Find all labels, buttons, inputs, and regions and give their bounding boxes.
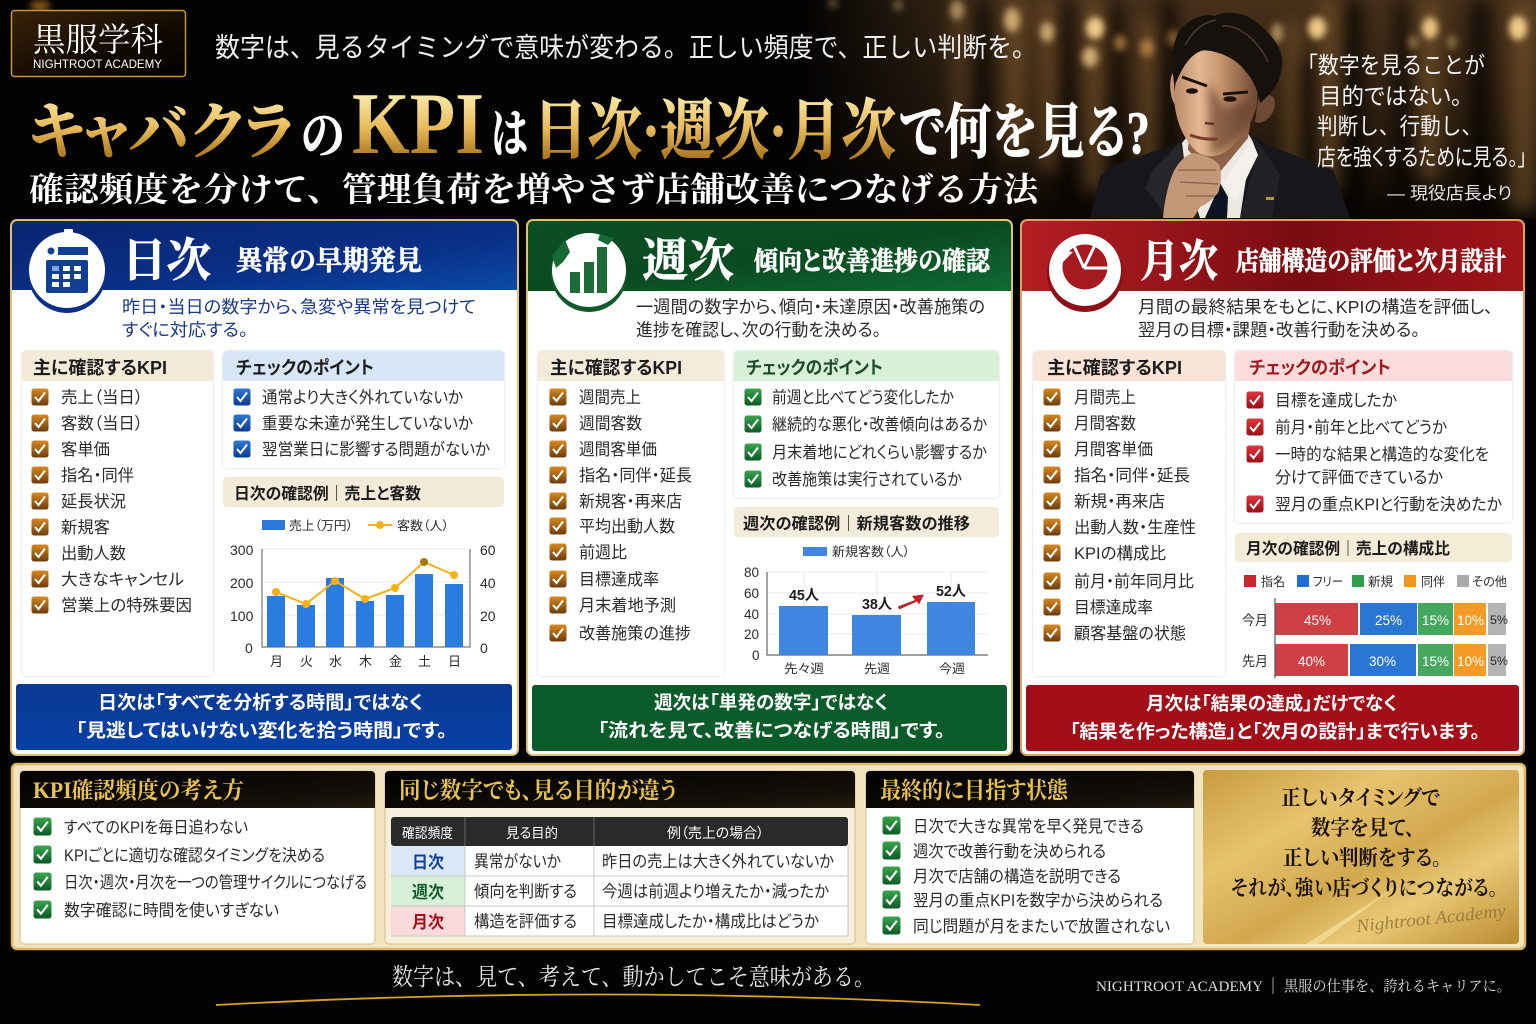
heading: 最終的に目指す状態 bbox=[880, 778, 1070, 803]
subheading: 異常の早期発見 bbox=[236, 246, 422, 276]
card: KPI list: 前月・前年同月比 bbox=[1074, 572, 1194, 591]
logo badge bbox=[12, 10, 186, 76]
message text: 数字を見て、 bbox=[1311, 816, 1415, 840]
comparison table: 見る目的 bbox=[506, 825, 558, 841]
combo chart: sales and customers: 60 bbox=[480, 542, 496, 558]
bar chart: new customers: 先々週 bbox=[784, 662, 825, 676]
checklist: 週次で改善行動を決められる bbox=[913, 842, 1106, 861]
comparison table: 確認頻度 bbox=[402, 825, 453, 841]
chart title: 日次の確認例｜売上と客数 bbox=[234, 484, 421, 503]
checklist: 数字確認に時間を使いすぎない bbox=[64, 901, 279, 920]
stacked bar chart: sales composition: 10% bbox=[1457, 654, 1484, 669]
combo chart: sales and customers: 月 bbox=[270, 654, 283, 669]
main title: で何を見る? bbox=[899, 100, 1150, 166]
card: 最終的に目指す状態 bbox=[866, 771, 1194, 944]
combo chart: sales and customers: 0 bbox=[480, 640, 488, 656]
footer curve bbox=[216, 994, 980, 1005]
main title: 日次·週次·月次 bbox=[533, 95, 896, 168]
card: KPI list: 指名・同伴・延長 bbox=[1074, 466, 1190, 485]
card: check points: チェックのポイント bbox=[1249, 357, 1391, 378]
stacked bar chart: sales composition bbox=[1242, 574, 1508, 678]
combo chart: sales and customers: 土 bbox=[418, 654, 431, 669]
stacked bar chart: sales composition: 15% bbox=[1422, 654, 1449, 669]
description: 昨日・当日の数字から、急変や異常を見つけて bbox=[122, 297, 476, 317]
banner: 「流れを見て、改善につなげる時間」です。 bbox=[598, 720, 945, 741]
chart title: 週次の確認例｜新規客数の推移 bbox=[743, 514, 970, 533]
comparison table: 今週は前週より増えたか・減ったか bbox=[602, 882, 829, 901]
bar chart: new customers: 40 bbox=[744, 607, 759, 622]
card: KPI list: 主に確認するKPI bbox=[33, 358, 167, 378]
main title: KPI bbox=[352, 76, 484, 173]
card: KPI list: 月末着地予測 bbox=[579, 596, 676, 615]
card: KPI list: 週間客単価 bbox=[579, 440, 657, 459]
chart title bbox=[223, 477, 504, 507]
message text: それが、強い店づくりにつながる。 bbox=[1231, 876, 1498, 900]
card: KPI確認頻度の考え方 bbox=[20, 771, 375, 944]
combo chart: sales and customers: 20 bbox=[480, 608, 496, 624]
description: 翌月の目標・課題・改善行動を決める。 bbox=[1138, 320, 1420, 340]
card: KPI list: 週間客数 bbox=[579, 414, 642, 433]
combo chart: sales and customers: 売上（万円） bbox=[289, 518, 353, 533]
stacked bar chart: sales composition: 同伴 bbox=[1421, 575, 1445, 589]
panel frame bbox=[1021, 220, 1524, 755]
main title: キャバクラ bbox=[28, 99, 294, 167]
checklist: KPIごとに適切な確認タイミングを決める bbox=[64, 846, 325, 865]
stacked bar chart: sales composition: 30% bbox=[1369, 654, 1396, 669]
quote: ― 現役店長より bbox=[1387, 184, 1512, 203]
checklist: 日次・週次・月次を一つの管理サイクルにつなげる bbox=[64, 873, 367, 892]
checklist: すべてのKPIを毎日追わない bbox=[64, 818, 248, 837]
card: check points bbox=[223, 351, 504, 468]
card: KPI list: 出動人数 bbox=[61, 544, 126, 563]
card: check points: 継続的な悪化・改善傾向はあるか bbox=[772, 415, 987, 434]
description bbox=[636, 297, 985, 340]
combo chart: sales and customers: 40 bbox=[480, 575, 496, 591]
card: check points: 前週と比べてどう変化したか bbox=[772, 388, 954, 407]
bar chart: new customers: 先週 bbox=[864, 662, 891, 676]
bar chart: new customers: 20 bbox=[744, 627, 759, 642]
card: check points: チェックのポイント bbox=[746, 357, 883, 378]
tagline: 数字は、見るタイミングで意味が変わる。正しい頻度で、正しい判断を。 bbox=[215, 33, 1037, 63]
header band bbox=[528, 221, 1011, 291]
footer credit: NIGHTROOT ACADEMY bbox=[1096, 979, 1263, 995]
main title: の bbox=[300, 108, 345, 166]
description bbox=[1138, 297, 1493, 340]
header band bbox=[1022, 221, 1523, 291]
card: KPI list: 顧客基盤の状態 bbox=[1074, 624, 1186, 643]
bar chart: new customers: 今週 bbox=[939, 661, 966, 676]
bar chart: new customers: 45人 bbox=[789, 588, 819, 604]
card: check points: 月末着地にどれくらい影響するか bbox=[772, 443, 987, 462]
card: KPI list: 新規客・再来店 bbox=[579, 492, 682, 511]
card: KPI list: 出動人数・生産性 bbox=[1074, 518, 1196, 537]
stacked bar chart: sales composition: 今月 bbox=[1242, 613, 1268, 628]
banner: 日次は「すべてを分析する時間」ではなく bbox=[98, 692, 423, 713]
icon: growth bars bbox=[551, 233, 627, 312]
card: check points bbox=[1235, 351, 1512, 523]
heading: 日次 bbox=[122, 235, 211, 286]
card: KPI list: 営業上の特殊要因 bbox=[61, 596, 192, 615]
banner: 「結果を作った構造」と「次月の設計」まで行います。 bbox=[1070, 721, 1480, 742]
message text bbox=[1231, 786, 1498, 900]
card: KPI list: 客単価 bbox=[61, 440, 110, 459]
card: gold closing message bbox=[1203, 770, 1519, 944]
card: KPI list: 月間客単価 bbox=[1074, 440, 1153, 459]
stacked bar chart: sales composition: 先月 bbox=[1242, 654, 1268, 669]
logo badge: 黒服学科 bbox=[33, 22, 163, 59]
comparison table: 月次 bbox=[412, 913, 444, 932]
quote bbox=[1297, 52, 1527, 203]
bar chart: new customers: 60 bbox=[744, 586, 759, 601]
card: KPI list: 指名・同伴・延長 bbox=[579, 466, 692, 485]
bar chart: new customers: 52人 bbox=[936, 584, 966, 600]
stacked bar chart: sales composition: 5% bbox=[1490, 656, 1508, 668]
comparison table bbox=[391, 817, 848, 936]
card: KPI list: 新規客 bbox=[61, 518, 110, 537]
combo chart: sales and customers bbox=[230, 518, 496, 669]
banner bbox=[532, 685, 1007, 751]
comparison table: 異常がないか bbox=[474, 852, 561, 871]
combo chart: sales and customers: 水 bbox=[329, 654, 342, 669]
card: check points: 一時的な結果と構造的な変化を bbox=[1275, 445, 1489, 464]
bar chart: new customers: 0 bbox=[752, 648, 760, 663]
description: すぐに対応する。 bbox=[122, 320, 248, 340]
description: 進捗を確認し、次の行動を決める。 bbox=[636, 320, 881, 340]
arrow bbox=[898, 594, 924, 610]
stacked bar chart: sales composition: 40% bbox=[1298, 654, 1325, 669]
combo chart: sales and customers: 日 bbox=[448, 654, 461, 669]
main title bbox=[28, 76, 1150, 173]
card: check points: 目標を達成したか bbox=[1275, 391, 1397, 410]
comparison table: 週次 bbox=[412, 883, 444, 902]
comparison table: 日次 bbox=[412, 853, 444, 872]
card: KPI list: 大きなキャンセル bbox=[61, 570, 184, 589]
combo chart: sales and customers: 300 bbox=[230, 542, 254, 558]
person: manager in suit bbox=[1090, 13, 1350, 218]
panel: 日次 bbox=[11, 220, 518, 755]
card: KPI list: 指名・同伴 bbox=[61, 466, 134, 485]
card: check points: 前月・前年と比べてどうか bbox=[1275, 418, 1447, 437]
checklist: 同じ問題が月をまたいで放置されない bbox=[913, 917, 1170, 936]
message text: 正しい判断をする。 bbox=[1283, 846, 1442, 870]
bottom gold frame bbox=[12, 764, 1525, 949]
card: KPI list bbox=[1033, 351, 1225, 676]
quote: 判断し、行動し、 bbox=[1317, 113, 1482, 139]
card: check points: 通常より大きく外れていないか bbox=[262, 388, 463, 407]
stacked bar chart: sales composition: 新規 bbox=[1368, 574, 1393, 589]
card: check points: チェックのポイント bbox=[236, 357, 374, 378]
bokeh background bbox=[30, 0, 1536, 218]
message text: 正しいタイミングで bbox=[1281, 786, 1440, 810]
checklist bbox=[34, 818, 367, 920]
footer slogan: 数字は、見て、考えて、動かしてこそ意味がある。 bbox=[392, 964, 875, 991]
subheading: 傾向と改善進捗の確認 bbox=[754, 246, 992, 276]
comparison table: 目標達成したか・構成比はどうか bbox=[602, 912, 819, 931]
subheading: 店舗構造の評価と次月設計 bbox=[1236, 247, 1506, 276]
card: check points: 翌営業日に影響する問題がないか bbox=[262, 440, 490, 459]
header band bbox=[12, 221, 517, 290]
card: KPI list: 延長状況 bbox=[61, 492, 126, 511]
card: KPI list: 売上（当日） bbox=[61, 388, 143, 407]
stacked bar chart: sales composition: 指名 bbox=[1261, 574, 1285, 589]
quote: 目的ではない。 bbox=[1319, 83, 1462, 109]
heading: 同じ数字でも、見る目的が違う bbox=[399, 778, 677, 803]
logo badge: NIGHTROOT ACADEMY bbox=[33, 59, 162, 71]
card: check points: 改善施策は実行されているか bbox=[772, 470, 962, 489]
combo chart: sales and customers: 火 bbox=[300, 654, 313, 669]
card: KPI list: 平均出動人数 bbox=[579, 517, 675, 536]
bar chart: new customers: 80 bbox=[744, 565, 759, 580]
signature: Nightroot Academy bbox=[1354, 900, 1507, 936]
description: 月間の最終結果をもとに、KPIの構造を評価し、 bbox=[1138, 297, 1493, 317]
checklist bbox=[883, 817, 1170, 936]
card: KPI list: 客数（当日） bbox=[61, 414, 143, 433]
card: KPI list bbox=[538, 351, 724, 676]
description: 一週間の数字から、傾向・未達原因・改善施策の bbox=[636, 297, 985, 317]
chart title: 月次の確認例｜売上の構成比 bbox=[1246, 539, 1450, 558]
bar chart: new customers: 新規客数（人） bbox=[832, 544, 910, 559]
comparison table: 構造を評価する bbox=[474, 912, 577, 931]
checklist: 翌月の重点KPIを数字から決められる bbox=[913, 891, 1163, 910]
main title: は bbox=[490, 107, 528, 164]
card: KPI list: 目標達成率 bbox=[1074, 598, 1153, 617]
card: check points bbox=[734, 351, 999, 498]
checklist: 日次で大きな異常を早く発見できる bbox=[913, 817, 1144, 836]
quote: 「数字を見ることが bbox=[1297, 52, 1485, 78]
card: KPI list: 改善施策の進捗 bbox=[579, 624, 691, 643]
card: KPI list: 目標達成率 bbox=[579, 570, 659, 589]
combo chart: sales and customers: 客数（人） bbox=[397, 518, 449, 533]
banner bbox=[16, 684, 512, 750]
panel: 週次 bbox=[527, 220, 1012, 755]
subtitle: 確認頻度を分けて、管理負荷を増やさず店舗改善につなげる方法 bbox=[29, 172, 1042, 209]
bar chart: new customers: 38人 bbox=[862, 597, 892, 613]
banner: 週次は「単発の数字」ではなく bbox=[654, 692, 888, 713]
banner bbox=[1026, 685, 1519, 751]
stacked bar chart: sales composition: 10% bbox=[1457, 613, 1484, 628]
card: KPI list: 主に確認するKPI bbox=[1047, 358, 1182, 378]
stacked bar chart: sales composition: 25% bbox=[1375, 613, 1402, 628]
card: KPI list: 主に確認するKPI bbox=[550, 358, 682, 378]
icon: pie chart bbox=[1047, 234, 1123, 312]
chart title bbox=[734, 507, 999, 537]
stacked bar chart: sales composition: その他 bbox=[1472, 575, 1507, 589]
combo chart: sales and customers: 200 bbox=[230, 575, 254, 591]
card: KPI list: 新規・再来店 bbox=[1074, 492, 1165, 511]
card: KPI list bbox=[22, 351, 213, 676]
card: check points: 分けて評価できているか bbox=[1275, 468, 1443, 487]
card: KPI list: KPIの構成比 bbox=[1074, 544, 1166, 563]
card: check points: 重要な未達が発生していないか bbox=[262, 414, 473, 433]
description bbox=[122, 297, 476, 340]
banner: 「見逃してはいけない変化を拾う時間」です。 bbox=[76, 720, 447, 741]
panel frame bbox=[11, 220, 518, 755]
card: check points: 翌月の重点KPIと行動を決めたか bbox=[1275, 495, 1502, 514]
card: KPI list: 月間売上 bbox=[1074, 388, 1136, 407]
footer credit: 黒服の仕事を、誇れるキャリアに。 bbox=[1284, 978, 1511, 995]
banner: 月次は「結果の達成」だけでなく bbox=[1146, 693, 1397, 714]
footer credit bbox=[1096, 977, 1511, 995]
combo chart: sales and customers: 金 bbox=[389, 654, 402, 669]
heading: 週次 bbox=[642, 235, 734, 286]
comparison table: 昨日の売上は大きく外れていないか bbox=[602, 852, 834, 871]
card: 同じ数字でも、見る目的が違う bbox=[385, 771, 855, 944]
card: KPI list: 月間客数 bbox=[1074, 414, 1136, 433]
heading: 月次 bbox=[1140, 237, 1218, 286]
combo chart: sales and customers: 0 bbox=[245, 640, 253, 656]
card: KPI list: 前週比 bbox=[579, 543, 627, 562]
comparison table: 例（売上の場合） bbox=[667, 825, 764, 841]
combo chart: sales and customers: 100 bbox=[230, 608, 254, 624]
panel: 月次 bbox=[1021, 220, 1524, 755]
stacked bar chart: sales composition: 5% bbox=[1490, 615, 1508, 627]
heading: KPI確認頻度の考え方 bbox=[33, 778, 244, 803]
comparison table: 傾向を判断する bbox=[474, 882, 577, 901]
icon: calendar bbox=[28, 229, 106, 313]
chart title bbox=[1235, 533, 1512, 562]
bar chart: new customers bbox=[744, 544, 988, 676]
panel frame bbox=[527, 220, 1012, 755]
stacked bar chart: sales composition: フリー bbox=[1313, 575, 1343, 589]
checklist: 月次で店舗の構造を説明できる bbox=[913, 867, 1121, 886]
stacked bar chart: sales composition: 45% bbox=[1304, 613, 1331, 628]
stacked bar chart: sales composition: 15% bbox=[1422, 613, 1449, 628]
combo chart: sales and customers: 木 bbox=[359, 654, 372, 669]
card: KPI list: 週間売上 bbox=[579, 388, 641, 407]
